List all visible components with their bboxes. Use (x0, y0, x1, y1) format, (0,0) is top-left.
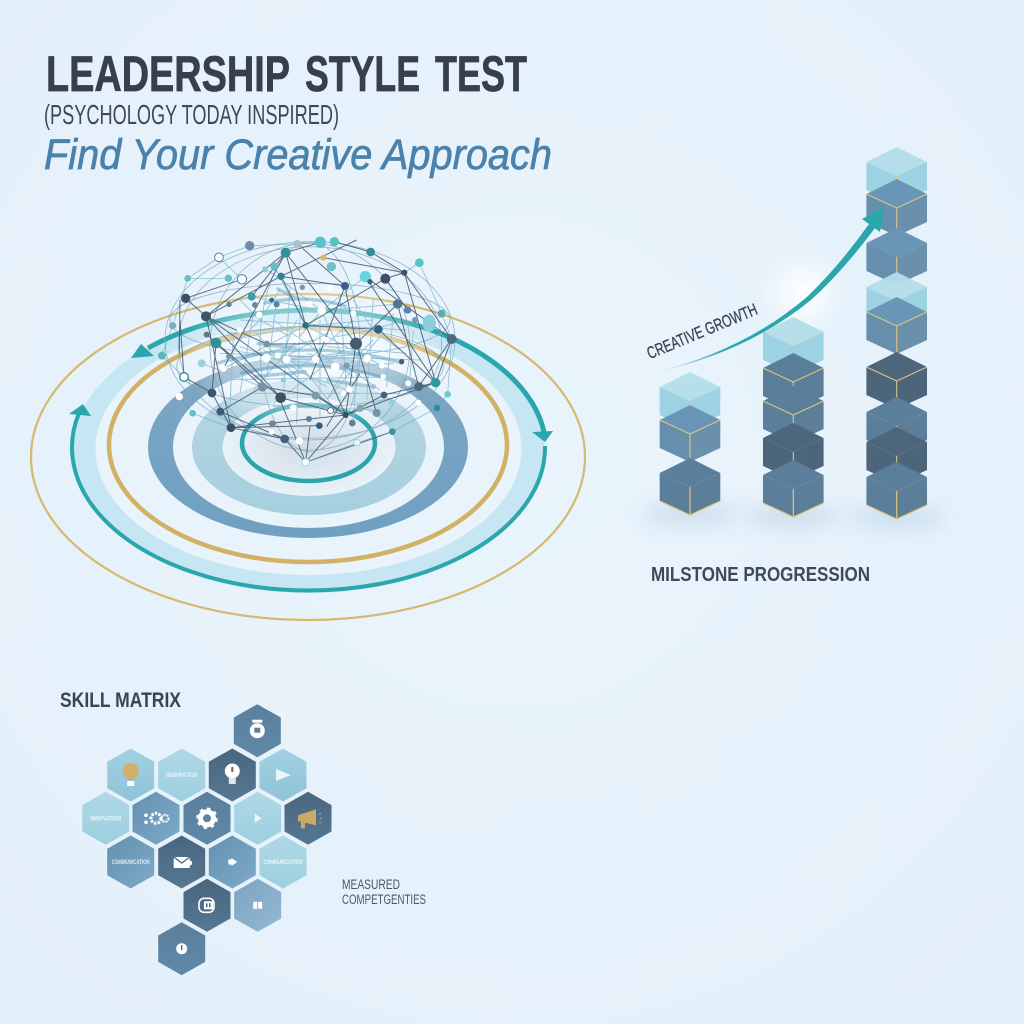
hex: communication right: COMMUNICATION (264, 860, 302, 866)
growth arrow (657, 207, 884, 372)
creative growth label: CREATIVE GROWTH (644, 300, 760, 363)
sphere wire outlines (165, 242, 455, 452)
glow behind arrow (761, 251, 845, 335)
dark mesh (179, 240, 452, 462)
skill matrix hexagons (82, 704, 332, 975)
teal mesh (162, 242, 452, 462)
hex: inspiration: INSPIRATION (166, 772, 197, 779)
blue ring (148, 356, 468, 538)
cube shadows (642, 503, 945, 528)
teal arrow: lower arc (69, 404, 545, 591)
hex: megaphone (284, 792, 332, 845)
center teal ring (242, 405, 375, 481)
subtitle: (PSYCHOLOGY TODAY INSPIRED) (44, 99, 339, 130)
milestone caption: MILSTONE PROGRESSION (651, 563, 870, 586)
hex: gear (184, 792, 230, 845)
tagline: Find Your Creative Approach (44, 131, 552, 179)
hex: top icon (234, 704, 281, 757)
hex: info (158, 922, 205, 975)
hex: communication right (260, 836, 306, 888)
blue fragments (217, 288, 403, 387)
hex: gears (132, 792, 180, 845)
outer gold ring (31, 294, 585, 620)
column 2 (763, 317, 824, 517)
hex: white bulb (209, 748, 256, 802)
hex: arrow (209, 836, 256, 888)
hex: communication left (107, 836, 154, 888)
pale band (72, 309, 544, 593)
hex: badge (184, 879, 230, 932)
hex: play (260, 748, 306, 802)
column 1 (660, 372, 720, 515)
hex: communication left: COMMUNICATION (112, 860, 150, 866)
title: TEST (435, 46, 527, 102)
measured competencies note: MEASURED (342, 877, 400, 892)
column 3 (866, 147, 927, 519)
title: LEADERSHIP (46, 46, 290, 102)
white haze (180, 277, 440, 430)
network nodes (158, 237, 457, 466)
teal arrow: upper arc (131, 310, 553, 442)
measured competencies note: COMPETGENTIES (342, 892, 426, 907)
light blue ring (192, 379, 426, 515)
network sphere (158, 237, 457, 466)
light mesh (202, 267, 420, 423)
hex: small play (234, 792, 281, 845)
hex: pages (234, 879, 281, 932)
hex: inspiration (158, 748, 205, 802)
concentric rings diagram (31, 294, 585, 620)
hex: innovation: INNOVATION (90, 815, 121, 822)
hex: envelope (158, 836, 205, 888)
skill matrix heading: SKILL MATRIX (60, 689, 181, 712)
milestone cube chart (642, 147, 945, 586)
hex: gold bulb (107, 748, 154, 802)
hex: innovation (82, 792, 129, 845)
title: STYLE (305, 46, 420, 102)
inner gold ring (109, 328, 507, 562)
